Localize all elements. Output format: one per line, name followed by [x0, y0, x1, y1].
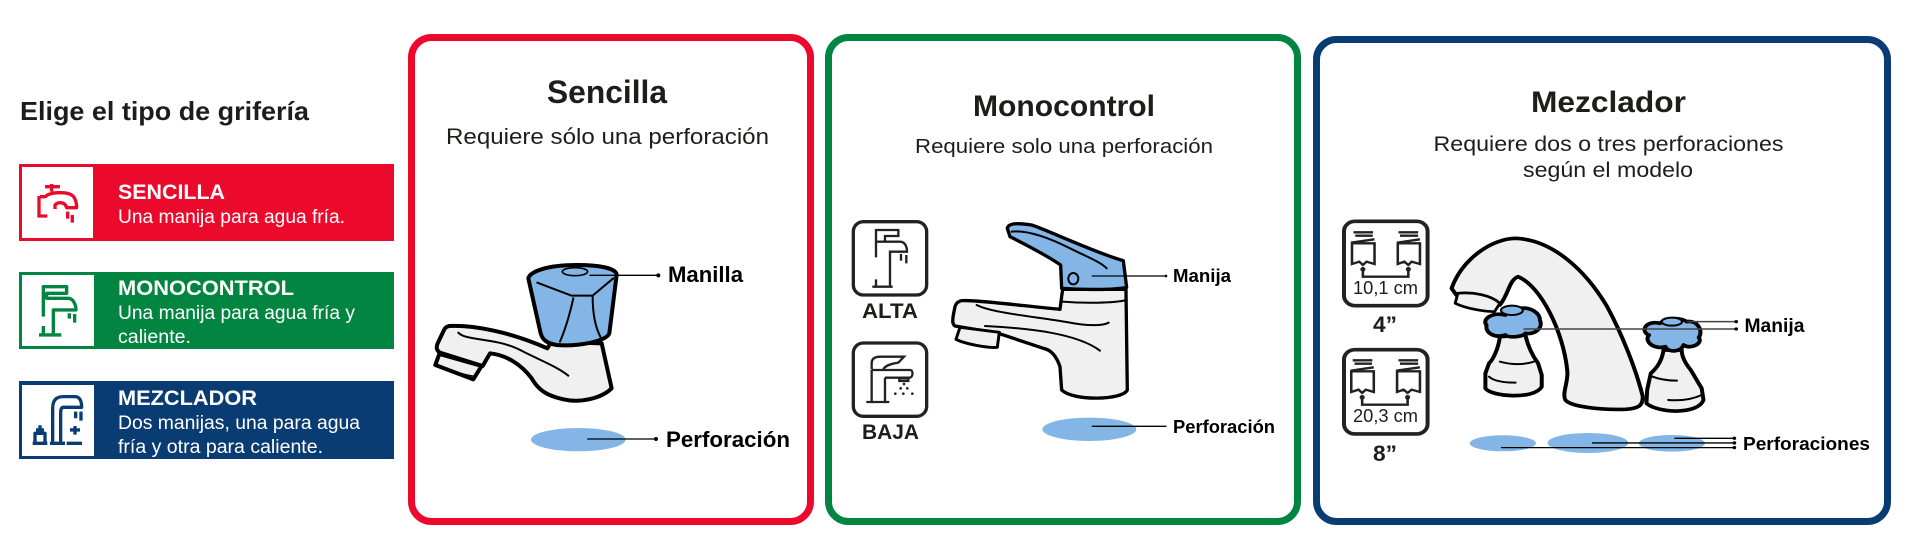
label: perforación: Perforación — [1173, 416, 1275, 437]
icon: 8 inch spacing — [1344, 350, 1428, 434]
legend bar: sencilla: Una manija para agua fría. — [118, 207, 345, 228]
legend bar: monocontrol: caliente. — [118, 327, 191, 348]
text: monocontrol requirement: Requiere solo una perforación — [915, 135, 1213, 158]
label: 8 inches: 8” — [1373, 441, 1397, 466]
legend bar: monocontrol: Una manija para agua fría y — [118, 303, 356, 324]
sidebar title: Elige el tipo de grifería — [20, 96, 310, 126]
illustration: single-lever tap — [953, 224, 1167, 398]
panel: mezclador — [1316, 40, 1888, 522]
label: manija: Manija — [1173, 265, 1232, 286]
text: mezclador requirement: según el modelo — [1523, 159, 1693, 182]
label: manija: Manija — [1744, 316, 1805, 337]
icon: alta — [853, 222, 927, 295]
text: mezclador requirement: Requiere dos o tres perforaciones — [1434, 133, 1784, 156]
legend bar: mezclador: fría y otra para caliente. — [118, 437, 323, 458]
label: 10,1 cm: 10,1 cm — [1353, 278, 1418, 298]
perforations: mezclador — [1470, 433, 1736, 453]
icon: baja — [853, 343, 927, 416]
heading: mezclador: Mezclador — [1531, 86, 1686, 119]
icon: simple tap — [38, 184, 77, 223]
sidebar: faucet type legend — [19, 96, 394, 459]
icon: single-lever tap — [39, 287, 76, 335]
icon: 4 inch spacing — [1344, 221, 1428, 306]
legend bar: mezclador: Dos manijas, una para agua — [118, 413, 360, 434]
label: 20,3 cm: 20,3 cm — [1353, 406, 1418, 426]
label: 4 inches: 4” — [1373, 312, 1397, 337]
illustration: three-piece mixer tap — [1452, 238, 1738, 411]
text: mezclador requirement — [1434, 133, 1784, 182]
legend bar: mezclador: MEZCLADOR — [118, 387, 257, 410]
legend bar: mezclador — [19, 381, 394, 459]
text: sencilla requirement: Requiere sólo una perforación — [446, 124, 769, 149]
legend bar: sencilla — [19, 164, 394, 241]
panel: sencilla — [412, 38, 810, 522]
panel: monocontrol — [828, 38, 1298, 522]
label: perforación: Perforación — [666, 427, 790, 452]
illustration: simple tap — [435, 265, 660, 401]
perforation: monocontrol — [1042, 418, 1166, 441]
legend bar: monocontrol — [19, 272, 394, 349]
perforation: sencilla — [531, 428, 658, 451]
legend bar: monocontrol: MONOCONTROL — [118, 277, 294, 300]
heading: monocontrol: Monocontrol — [973, 90, 1155, 123]
heading: sencilla: Sencilla — [547, 74, 667, 110]
label: perforaciones: Perforaciones — [1743, 433, 1870, 454]
legend bar: sencilla: SENCILLA — [118, 181, 225, 204]
label: manilla: Manilla — [668, 262, 744, 287]
label: alta: ALTA — [862, 300, 918, 323]
label: baja: BAJA — [862, 421, 919, 444]
icon: mixer tap — [33, 397, 82, 443]
